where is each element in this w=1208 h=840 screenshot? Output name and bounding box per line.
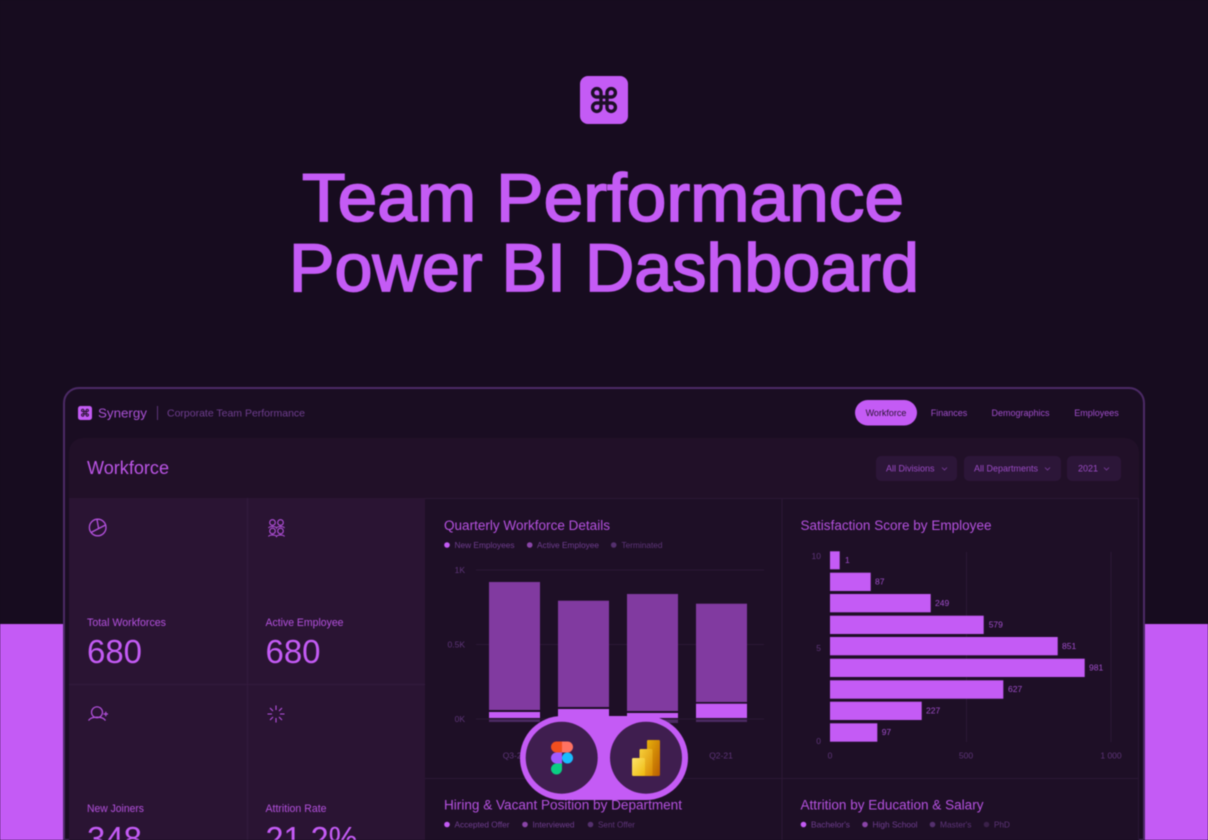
legend: quarterly workforce: Active Employee [537, 540, 599, 550]
chart: quarterly workforce details: Q4-20 [572, 750, 596, 760]
chart: quarterly workforce details: Q3-20 [503, 750, 527, 760]
chart: satisfaction score by employee: 249 [935, 598, 949, 608]
chart: satisfaction score by employee: 500 [959, 750, 973, 760]
filters [876, 456, 1121, 481]
chart: quarterly workforce details: 0.5K [448, 640, 465, 650]
panel: workforce content [69, 438, 1139, 840]
chart: satisfaction score by employee: 227 [926, 706, 940, 716]
KPI: attrition rate: Attrition Rate [266, 803, 326, 815]
purple background band [0, 624, 1208, 840]
legend: attrition: PhD [994, 820, 1010, 830]
navigation tabs: Workforce [866, 408, 906, 418]
chart: satisfaction score by employee: 10 [812, 551, 821, 561]
legend: attrition: Master's [940, 820, 972, 830]
chart: satisfaction score by employee: 0 [828, 750, 833, 760]
filters: All Departments [974, 464, 1039, 474]
bars: terminated [489, 720, 747, 723]
chart heading: hiring and vacant position [444, 798, 682, 830]
navigation tabs: Employees [1074, 408, 1119, 418]
KPI: total workforces [87, 519, 166, 670]
filters: All Divisions [886, 464, 935, 474]
legend: hiring [444, 820, 635, 830]
logo: Synergy [78, 406, 148, 420]
panel: KPI cards [69, 498, 425, 840]
chart: quarterly workforce details [444, 518, 764, 760]
legend: attrition [801, 820, 1010, 830]
navigation tabs: Finances [931, 408, 968, 418]
chart: satisfaction score by employee: 1 000 [1100, 750, 1122, 760]
legend: hiring: Accepted Offer [454, 820, 510, 830]
chart: satisfaction score by employee: 1 [845, 555, 850, 565]
KPI: active employee: Active Employee [266, 617, 344, 629]
chart heading: attrition by education and salary [800, 798, 1010, 830]
title: Team Performance [302, 160, 904, 236]
chart: quarterly workforce details: Q2-21 [709, 750, 733, 760]
KPI: active employee [266, 520, 344, 670]
title: Power BI Dashboard [289, 230, 919, 306]
chart heading: hiring and vacant position: Hiring & Vacant Position by Department [444, 798, 682, 812]
icon: command logo [580, 76, 628, 124]
icon: power bi [632, 740, 660, 776]
heading: quarterly workforce: Quarterly Workforce Details [444, 518, 610, 533]
title [289, 160, 919, 306]
badge: tool logos [520, 716, 688, 800]
chart: quarterly workforce details: Q1-21 [641, 750, 665, 760]
legend: hiring: Interviewed [532, 820, 575, 830]
KPI: active employee: 680 [266, 633, 320, 670]
bars: new employees [489, 704, 747, 718]
panel: chart area [425, 498, 1139, 840]
navigation tabs: Demographics [991, 408, 1050, 418]
legend: quarterly workforce: New Employees [454, 540, 514, 550]
chart: satisfaction score by employee: 627 [1008, 684, 1022, 694]
chart: satisfaction score by employee: 579 [989, 620, 1003, 630]
legend: attrition: Bachelor's [811, 820, 850, 830]
bars: active employee [489, 582, 747, 711]
KPI: new joiners: New Joiners [87, 803, 144, 815]
KPI: attrition rate [266, 706, 358, 840]
chart: satisfaction score by employee: 5 [816, 643, 821, 653]
chart: quarterly workforce details: 1K [455, 565, 465, 575]
KPI: new joiners [87, 707, 144, 840]
logo: Synergy: Synergy [98, 406, 148, 420]
subtitle: Corporate Team Performance [167, 408, 305, 420]
chart: satisfaction score by employee: 981 [1089, 662, 1103, 672]
navigation tabs [855, 400, 1119, 426]
chart: satisfaction score by employee [800, 518, 1122, 760]
legend: quarterly workforce: Terminated [622, 540, 663, 550]
legend: quarterly workforce [444, 540, 663, 550]
chart heading: attrition by education and salary: Attrition by Education & Salary [800, 798, 984, 812]
legend: attrition: High School [872, 820, 918, 830]
chart: satisfaction score by employee: 851 [1062, 641, 1076, 651]
filters: 2021 [1078, 464, 1098, 474]
chart: satisfaction score by employee: 97 [882, 727, 891, 737]
legend: hiring: Sent Offer [598, 820, 635, 830]
heading: Workforce: Workforce [87, 458, 169, 478]
KPI: total workforces: Total Workforces [87, 617, 166, 629]
logo: Synergy: ⌘ [80, 408, 90, 420]
heading: satisfaction score: Satisfaction Score by Employee [800, 518, 992, 533]
chart: satisfaction score by employee: 87 [875, 576, 885, 586]
icon: figma [551, 742, 573, 775]
KPI: total workforces: 680 [87, 633, 142, 670]
chart: quarterly workforce details: 0K [455, 714, 465, 724]
panel: dashboard window [64, 388, 1144, 840]
chart: satisfaction score by employee: 0 [816, 736, 821, 746]
